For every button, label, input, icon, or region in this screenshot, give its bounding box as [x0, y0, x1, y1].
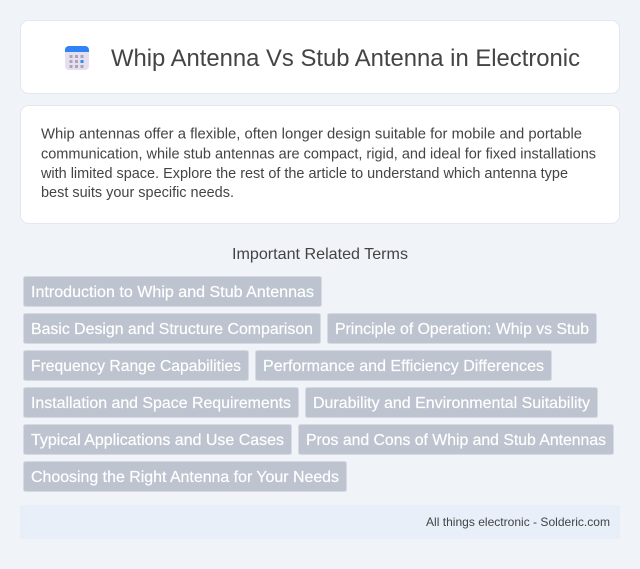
tag: Choosing the Right Antenna for Your Needs: [31, 469, 339, 486]
text block: summary: [40, 126, 596, 201]
tag list: [24, 276, 614, 492]
text block: summary: Whip antennas offer a flexible, often longer design suitable for mobile and portable: [41, 126, 582, 142]
tag: [24, 314, 320, 344]
tag: [24, 350, 248, 380]
tag: [24, 424, 292, 454]
text block: summary: best suits your specific needs.: [41, 185, 234, 201]
panel: summary: [20, 106, 620, 224]
tag: [256, 350, 552, 380]
title: Whip Antenna Vs Stub Antenna in Electronic: [111, 45, 580, 72]
text block: summary: communication, while stub antennas are compact, rigid, and ideal for fixed installations: [41, 146, 596, 162]
tag: [24, 388, 298, 418]
panel: header: [20, 20, 620, 94]
tag: Durability and Environmental Suitability: [313, 395, 590, 412]
tag: Typical Applications and Use Cases: [31, 432, 284, 449]
tag: Installation and Space Requirements: [31, 395, 291, 412]
tag: [328, 314, 596, 344]
tag: Principle of Operation: Whip vs Stub: [335, 321, 589, 338]
tag: Frequency Range Capabilities: [31, 358, 241, 375]
text block: summary: with limited space. Explore the rest of the article to understand which antenna type: [40, 166, 568, 182]
tag: Pros and Cons of Whip and Stub Antennas: [306, 432, 606, 449]
tag: [306, 388, 598, 418]
tag: Introduction to Whip and Stub Antennas: [31, 284, 314, 301]
tag: Basic Design and Structure Comparison: [31, 321, 313, 338]
heading: related terms: Important Related Terms: [232, 246, 408, 263]
tag: Performance and Efficiency Differences: [263, 358, 544, 375]
tag: [24, 462, 346, 492]
tag: [24, 276, 322, 306]
footer: [20, 505, 620, 539]
icon: calendar: [65, 46, 89, 70]
footer: All things electronic - Solderic.com: [426, 515, 610, 529]
tag: [298, 424, 614, 454]
